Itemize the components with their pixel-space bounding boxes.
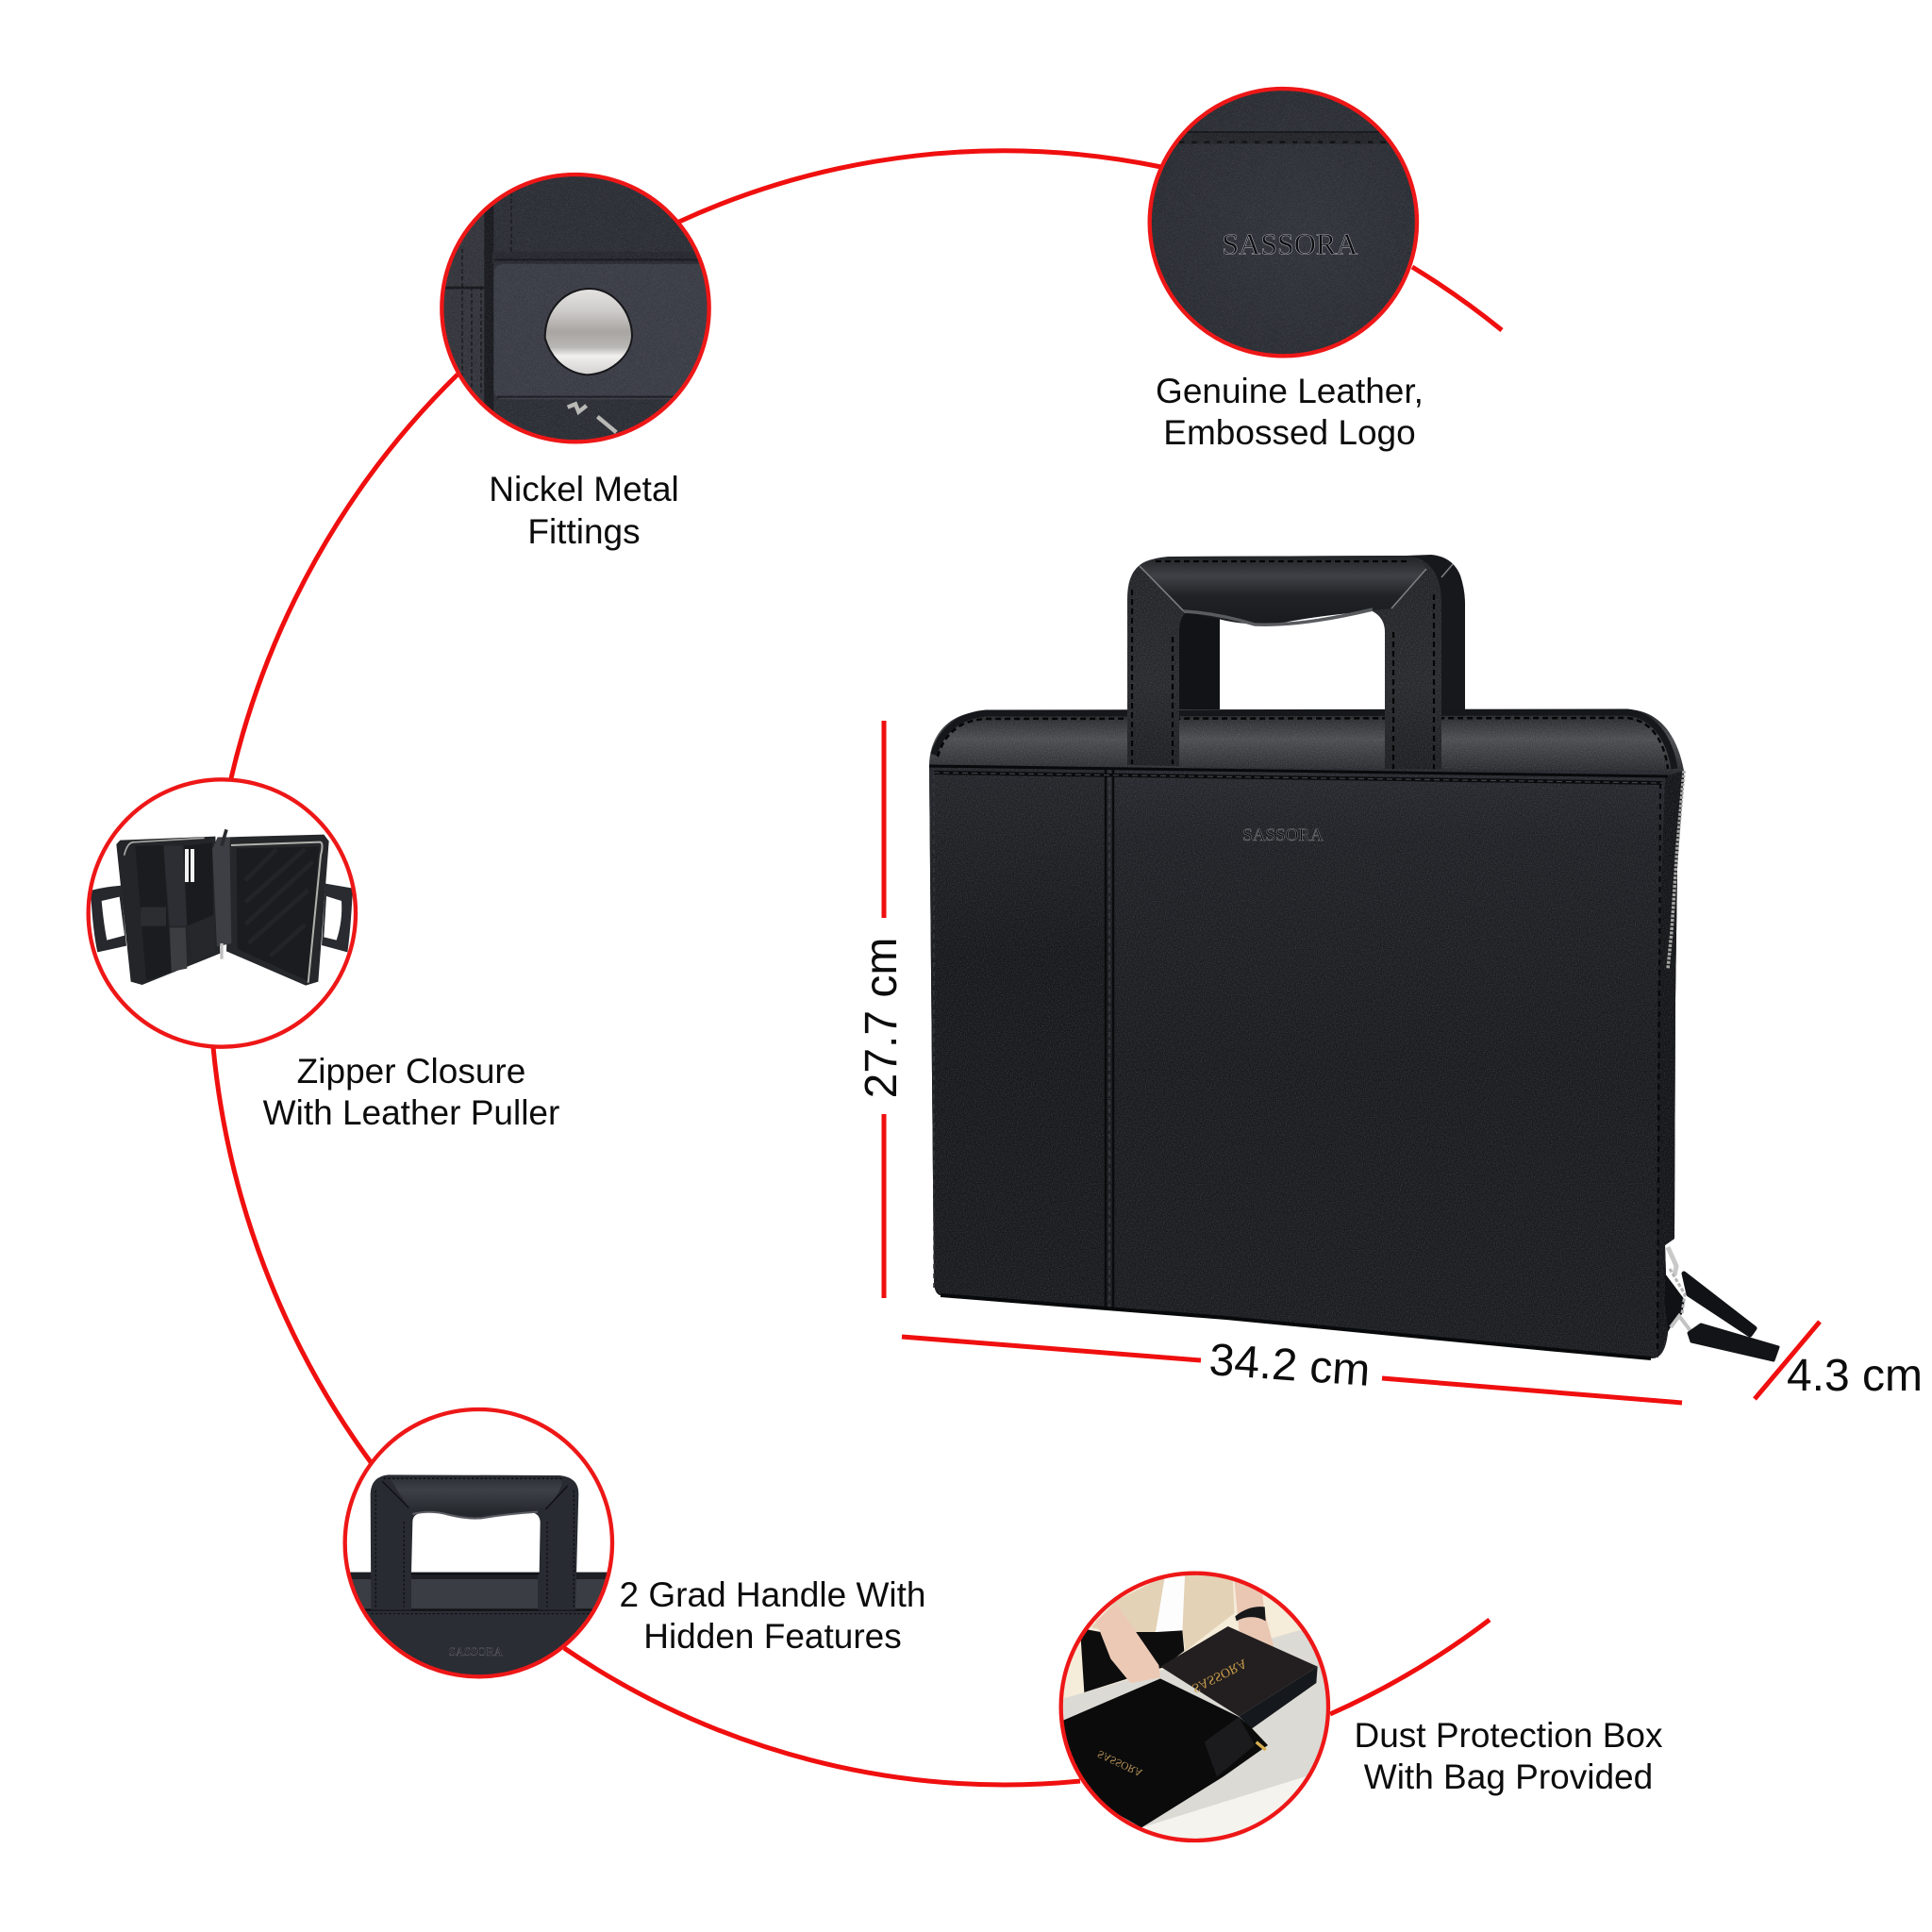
- spine: [212, 837, 231, 946]
- text: grad handle: Hidden Features: [643, 1617, 902, 1656]
- connecting arc: handle circle to box circle: [564, 1648, 1080, 1785]
- panel: genuine leather embossed logo photo circle: [1147, 87, 1419, 358]
- side strip: [1657, 771, 1684, 1358]
- panel: zipper open folio photo circle: [89, 779, 356, 1047]
- dimension: depth line: [1755, 1322, 1820, 1399]
- handle inner side: [1179, 613, 1220, 709]
- product: black leather folio bag: [929, 555, 1778, 1360]
- dimension: width label: 34.2 cm: [1208, 1335, 1372, 1396]
- text: dust protection box: With Bag Provided: [1364, 1757, 1653, 1796]
- side zipper: [1668, 771, 1684, 969]
- top back panel: [929, 709, 1684, 783]
- panel: dust protection box photo circle: SASSORA: [1096, 1748, 1145, 1778]
- text: dust protection box: Dust Protection Box: [1355, 1716, 1663, 1755]
- handle grip band: [1140, 556, 1426, 625]
- connecting arc: zipper circle to handle circle: [213, 1047, 371, 1462]
- dimension: depth label: 4.3 cm: [1787, 1351, 1923, 1401]
- panel: nickel metal fittings photo circle: [440, 172, 711, 443]
- handle straps: [1127, 556, 1441, 772]
- icon: nickel rivet: [545, 289, 632, 375]
- table: [1062, 1630, 1326, 1827]
- right interior panel: [226, 835, 329, 986]
- right handle: [322, 884, 353, 952]
- text: grad handle: 2 Grad Handle With: [620, 1575, 925, 1614]
- text: genuine leather embossed logo: Embossed Logo: [1163, 413, 1416, 452]
- handle rear layer: [1406, 555, 1465, 713]
- person: [1091, 1575, 1234, 1651]
- front pocket body: [929, 766, 1684, 1358]
- connecting arc: box circle to bottom right tail: [1330, 1620, 1490, 1714]
- dimension: width line: [902, 1337, 1682, 1403]
- zipper pull: [1665, 1247, 1778, 1360]
- left handle: [91, 886, 126, 952]
- embossed logo: SASSORA: [1242, 825, 1324, 845]
- connecting arc: top right tail through logo circle: [1412, 267, 1502, 330]
- embossed logo: SASSORA: [449, 1645, 504, 1658]
- connecting arc: logo circle to nickel circle: [679, 151, 1161, 222]
- handle: [371, 1474, 578, 1610]
- left interior panel: [116, 837, 220, 985]
- left gusset section: [929, 766, 1108, 1308]
- panel: handle photo circle: [343, 1407, 615, 1679]
- dimension: height line: [881, 721, 887, 1298]
- text: zipper closure: With Leather Puller: [263, 1093, 559, 1132]
- text: nickel metal fittings: Fittings: [527, 512, 641, 551]
- panel: dust protection box photo circle: SASSORA: [1190, 1656, 1249, 1695]
- text: nickel metal fittings: Nickel Metal: [489, 470, 679, 508]
- panel: dust protection box photo circle: [1058, 1572, 1330, 1843]
- dust bag: [1057, 1678, 1268, 1827]
- connecting arc: nickel circle to zipper circle: [231, 375, 458, 778]
- text: genuine leather embossed logo: Genuine Leather,: [1156, 372, 1424, 410]
- gift box: [1160, 1626, 1318, 1716]
- dimension: height label: 27.7 cm: [857, 938, 907, 1098]
- text: zipper closure: Zipper Closure: [297, 1052, 525, 1091]
- embossed logo: SASSORA: [1222, 226, 1357, 260]
